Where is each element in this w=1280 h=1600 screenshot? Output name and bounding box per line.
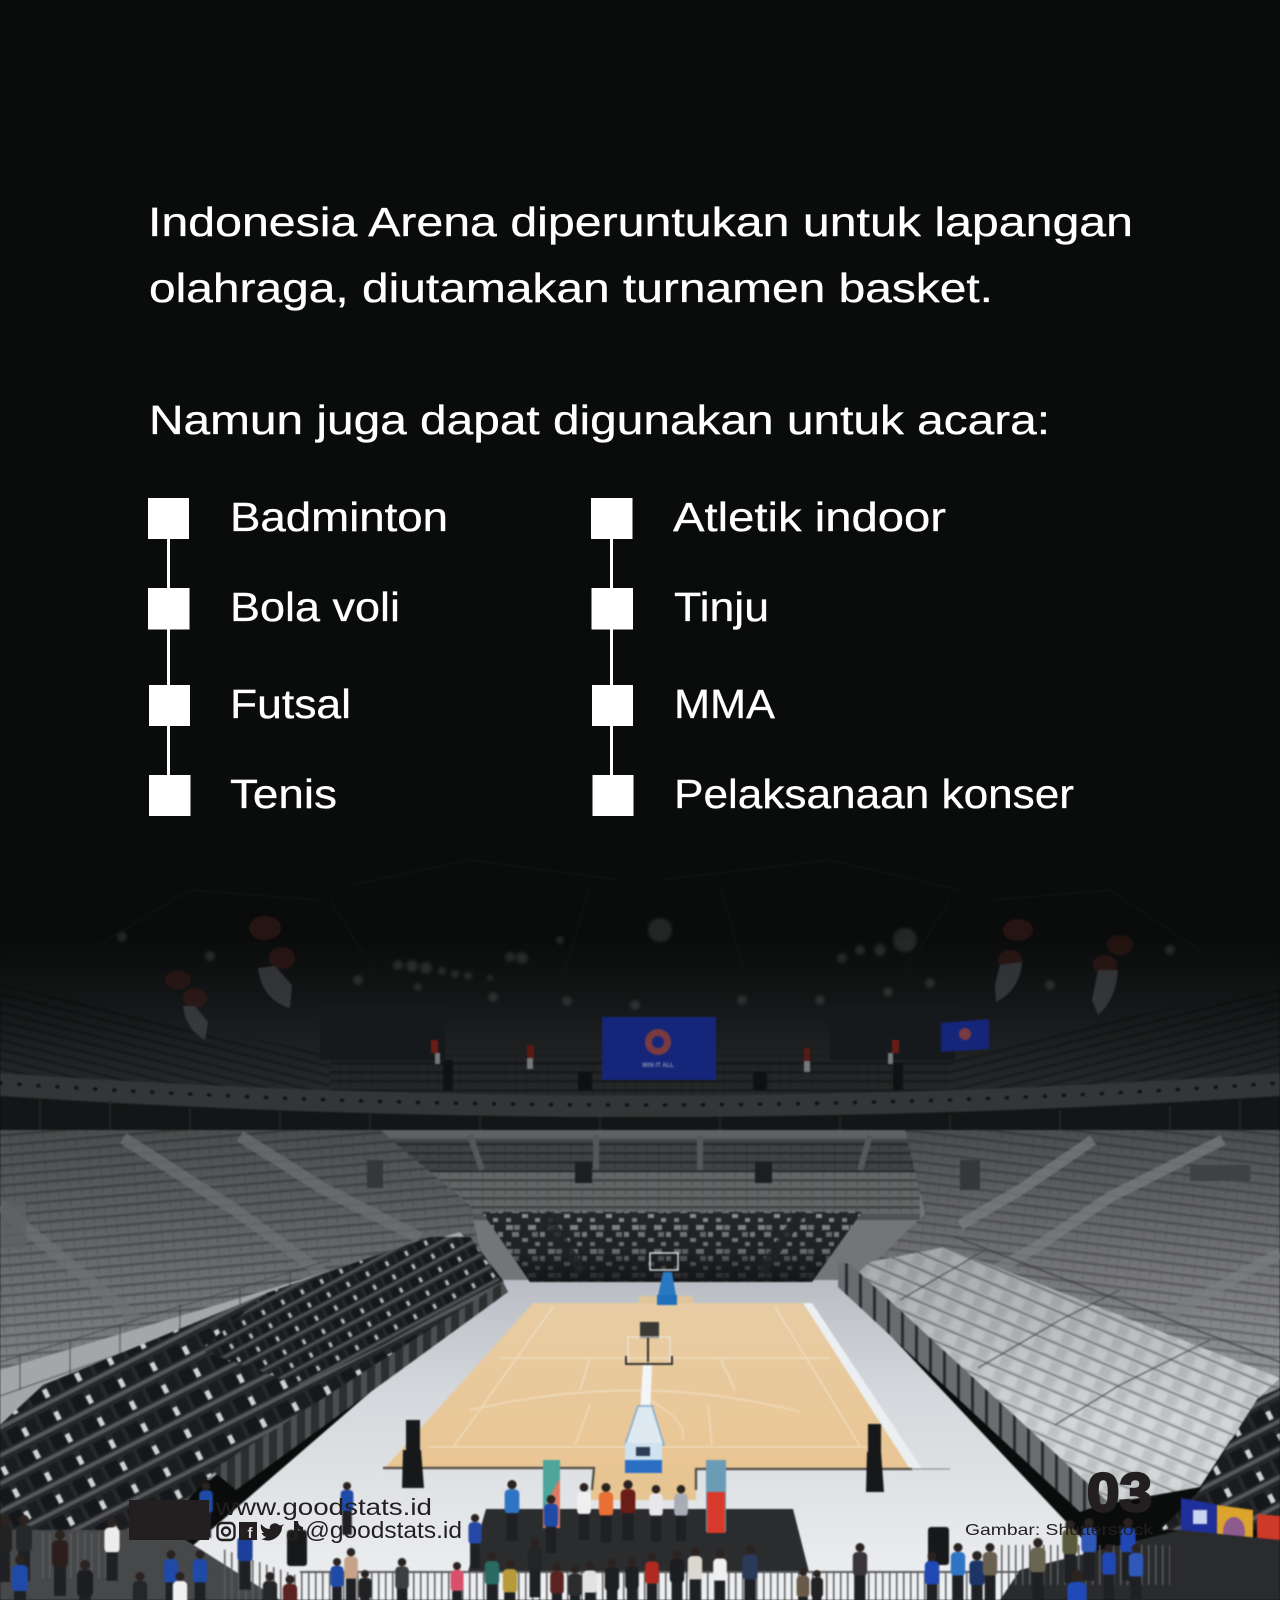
stage (468, 1509, 809, 1572)
hoop: near (625, 1322, 672, 1473)
image credit: Gambar: Shutterstock (965, 1522, 1154, 1539)
list heading: Namun juga dapat digunakan untuk acara: (149, 397, 1050, 443)
speakers (287, 1420, 949, 1566)
intro text: Indonesia Arena diperuntukan untuk lapangan (148, 199, 1133, 245)
list: events, right column: MMA (674, 681, 776, 727)
list: sports, left column: Bola voli (230, 584, 400, 630)
list: events, right column: Atletik indoor (673, 494, 946, 540)
footer: logo placeholder block (129, 1500, 209, 1540)
icon: facebook: f (248, 1525, 254, 1542)
centre seats mosaic (482, 1212, 862, 1282)
scoreboard: main (602, 1017, 716, 1080)
side banners (1181, 1498, 1280, 1588)
lower tier: right stands (875, 1130, 1280, 1440)
list: events, right column: Pelaksanaan konser (674, 771, 1074, 817)
list: events, right column: Tinju (674, 584, 769, 630)
hanging decorations (165, 916, 1133, 1040)
list: sports, left column: Tenis (230, 771, 337, 817)
seats: left dark block (0, 1237, 508, 1530)
list: sports, left column (148, 494, 448, 817)
hoop: far (650, 1253, 678, 1305)
list: sports, left column: Badminton (230, 494, 448, 540)
banners on stage (543, 1460, 726, 1533)
icon: facebook (239, 1522, 257, 1542)
ring beam (0, 1073, 1280, 1130)
icon: instagram (218, 1523, 234, 1540)
icon: tiktok (287, 1521, 303, 1541)
upper tier and ceiling (0, 860, 1280, 1130)
photo: Indonesia Arena interior (0, 860, 1280, 1600)
intro text: olahraga, diutamakan turnamen basket. (149, 265, 993, 311)
seats: right covered white block (838, 1237, 1280, 1530)
floor (130, 1280, 1140, 1600)
wall behind stands (340, 1130, 940, 1300)
crowd and barriers (0, 1480, 1280, 1600)
list: sports, left column: Futsal (230, 681, 351, 727)
scoreboard: secondary (941, 1019, 989, 1052)
list: events, right column (591, 494, 1074, 817)
scoreboard: main: WIN IT ALL (642, 1063, 674, 1069)
lower tier: centre stands (360, 1130, 920, 1220)
footer: website: www.goodstats.id (215, 1494, 432, 1520)
basketball court (383, 1296, 950, 1500)
lower tier: left stands (0, 1130, 500, 1480)
icon: twitter (261, 1523, 284, 1541)
footer: social handle: @goodstats.id (305, 1517, 462, 1543)
intro text (148, 199, 1133, 311)
page number: 03 (1087, 1463, 1152, 1523)
